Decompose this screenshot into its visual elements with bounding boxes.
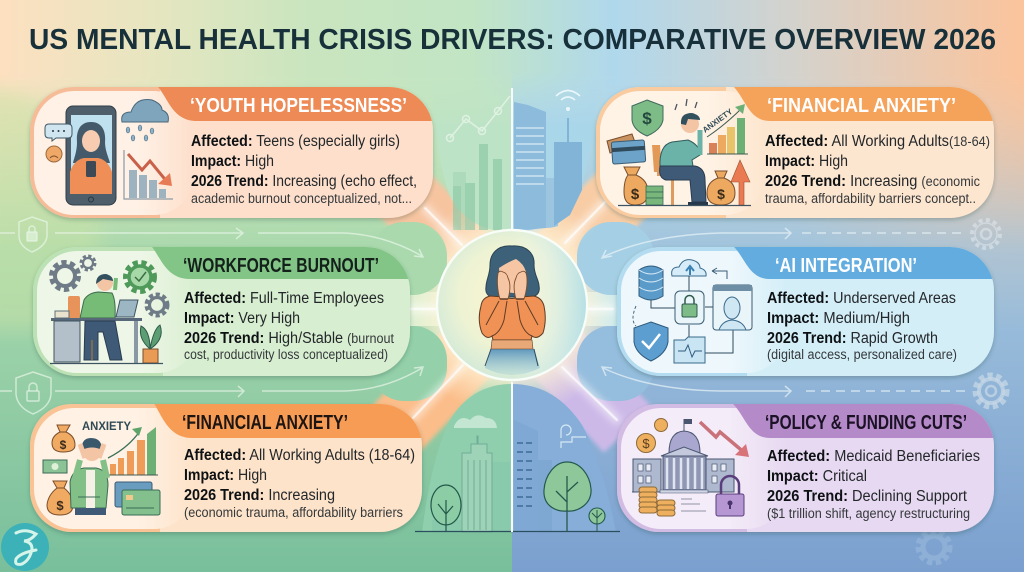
glow rays: [410, 200, 617, 420]
text block: Impact: Very High: [184, 310, 300, 327]
text block: Affected: All Working Adults (18-64): [184, 447, 415, 464]
text block: Affected: Medicaid Beneficiaries: [767, 448, 980, 465]
central figure: person in distress: [437, 230, 587, 380]
text block: ($1 trillion shift, agency restructuring: [767, 506, 970, 521]
center divider: [511, 88, 513, 532]
shield symbol: $: [642, 109, 652, 128]
icon: stressed person with money: [43, 421, 160, 515]
text block: academic burnout conceptualized, not...: [191, 191, 412, 206]
connector bands: [395, 188, 630, 430]
heading: ‘FINANCIAL ANXIETY’: [182, 412, 348, 434]
text block: [765, 133, 990, 206]
title: US MENTAL HEALTH CRISIS DRIVERS: COMPARATIVE OVERVIEW 2026: [29, 24, 996, 56]
text block: Impact: Critical: [767, 468, 867, 485]
skyline: bottom left building and tree: [431, 415, 510, 532]
skyline: top right buildings and wifi: [514, 90, 582, 231]
panel: policy and funding cuts: [617, 398, 1000, 532]
heading: ‘YOUTH HOPELESSNESS’: [190, 95, 407, 117]
text block: Affected: All Working Adults(18-64): [765, 133, 990, 150]
heading: ‘FINANCIAL ANXIETY’: [767, 95, 956, 117]
icon label text: ANXIETY: [82, 421, 131, 433]
money bag: $: [56, 498, 64, 513]
sky panel bottom right: [512, 384, 616, 532]
arms: [486, 301, 538, 336]
face: [499, 259, 526, 293]
coin symbol: $: [642, 436, 650, 451]
text block: 2026 Trend: Increasing (echo effect,: [191, 173, 417, 190]
sweater hem: [491, 340, 533, 349]
text block: Impact: High: [191, 153, 274, 170]
panel: financial anxiety left: [30, 398, 425, 532]
text block: Impact: High: [184, 467, 267, 484]
text block: (economic trauma, affordability barriers: [184, 505, 403, 520]
text block: [191, 133, 417, 206]
logo badge: [1, 523, 49, 571]
skyline: bottom right building and trees: [514, 420, 605, 532]
text block: [767, 448, 980, 521]
decorations right: arrows and gears: [602, 228, 965, 397]
icon: phone with sad teen: [45, 100, 173, 205]
icon: capitol with funding cuts: [632, 418, 749, 516]
text block: 2026 Trend: High/Stable (burnout: [184, 330, 394, 347]
panel: ai integration: [617, 240, 1000, 376]
panel: financial anxiety right: [596, 80, 1000, 218]
panel: workforce burnout: [33, 240, 415, 376]
text block: 2026 Trend: Rapid Growth: [767, 330, 938, 347]
connector lobes: [370, 222, 654, 401]
hair: [486, 246, 539, 297]
heading: ‘WORKFORCE BURNOUT’: [183, 255, 379, 277]
decorations left: shields and arrows: [0, 217, 423, 414]
skyline: top left chart and buildings: [446, 96, 510, 230]
text block: Affected: Underserved Areas: [767, 290, 956, 307]
text block: 2026 Trend: Increasing (economic: [765, 173, 980, 190]
sky panel bottom left: [422, 384, 512, 532]
text block: Impact: High: [765, 153, 848, 170]
bag symbol: $: [631, 186, 640, 203]
text block: [184, 447, 415, 520]
sky panel top left: [430, 70, 512, 232]
heading: ‘AI INTEGRATION’: [775, 255, 917, 277]
center circle: [437, 230, 587, 380]
text block: Affected: Full-Time Employees: [184, 290, 384, 307]
text block: cost, productivity loss conceptualized): [184, 347, 388, 362]
icon: gear lower right: [976, 376, 1006, 406]
heading: ‘POLICY & FUNDING CUTS’: [765, 412, 967, 434]
text block: 2026 Trend: Increasing: [184, 487, 335, 504]
bag symbol: $: [717, 186, 725, 202]
text block: [184, 290, 394, 362]
sky panel top right: [512, 70, 600, 232]
text block: [767, 290, 957, 362]
text block: Affected: Teens (especially girls): [191, 133, 400, 150]
text block: (digital access, personalized care): [767, 347, 957, 362]
jeans: [485, 349, 540, 375]
money bag: $: [60, 438, 67, 452]
icon: burnt out worker at desk: [50, 256, 167, 364]
icon: stressed man with bills: [607, 99, 751, 206]
panel: youth hopelessness: [30, 80, 440, 218]
text block: Impact: Medium/High: [767, 310, 910, 327]
icon: gear bottom: [919, 532, 949, 562]
ground line: [415, 530, 620, 532]
text block: trauma, affordability barriers concept..: [765, 191, 976, 206]
text block: 2026 Trend: Declining Support: [767, 488, 968, 505]
center glow: [400, 193, 624, 417]
icon: gear upper right: [972, 220, 1000, 248]
icon: ai health data network: [633, 260, 752, 363]
hands: [497, 271, 527, 299]
icon label text: ANXIETY: [701, 107, 735, 135]
sweater: [479, 296, 545, 340]
